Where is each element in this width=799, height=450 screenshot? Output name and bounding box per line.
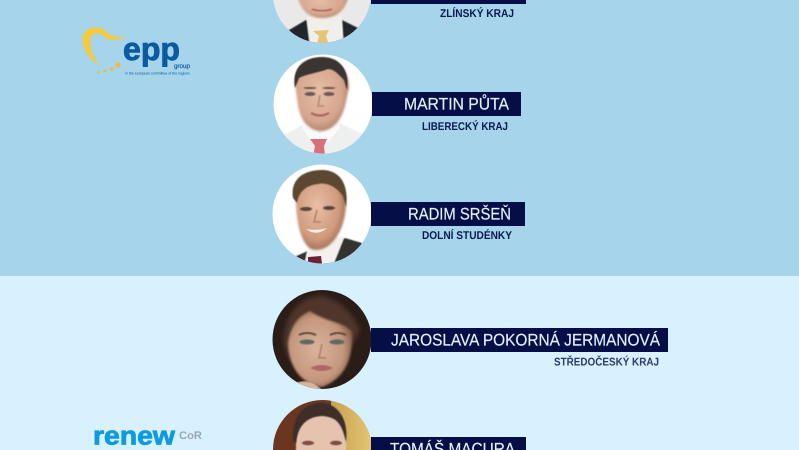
portrait — [272, 289, 372, 394]
region label: DOLNÍ STUDÉNKY — [422, 229, 512, 242]
name: MARTIN PŮTA — [404, 94, 510, 114]
member: Tomáš Macura — [272, 399, 526, 450]
icon: yellow heart outline — [83, 27, 127, 65]
wordmark: epp: epp — [123, 31, 180, 67]
portrait — [272, 399, 373, 450]
wordmark: renew: renew — [93, 420, 176, 450]
member: Martin Půta — [273, 54, 521, 156]
logo: Renew CoR — [93, 420, 202, 450]
name: JAROSLAVA POKORNÁ JERMANOVÁ — [391, 330, 661, 350]
member: Zlínský kraj — [273, 0, 526, 43]
portrait — [272, 164, 372, 266]
logo: EPP group — [83, 27, 190, 76]
region label: LIBERECKÝ KRAJ — [422, 120, 508, 133]
name bar — [371, 0, 526, 4]
name bar — [371, 328, 668, 352]
region label: ZLÍNSKÝ KRAJ — [440, 7, 514, 20]
tagline: in the european committee of the regions — [125, 72, 190, 76]
panel: EPP group section background — [0, 0, 799, 276]
region label: STŘEDOČESKÝ KRAJ — [554, 354, 659, 368]
wordmark: group: group — [174, 63, 190, 70]
name bar — [372, 92, 521, 116]
icon: stars — [97, 62, 121, 73]
name: RADIM SRŠEŇ — [408, 204, 511, 224]
portrait — [273, 0, 371, 43]
name bar — [371, 202, 525, 226]
member: Jaroslava Pokorná Jermanová — [272, 289, 668, 394]
member: Radim Sršeň — [272, 164, 525, 266]
name bar — [371, 437, 526, 450]
portrait — [273, 54, 373, 156]
panel: Renew section background — [0, 276, 799, 450]
wordmark: CoR: CoR — [179, 430, 202, 442]
